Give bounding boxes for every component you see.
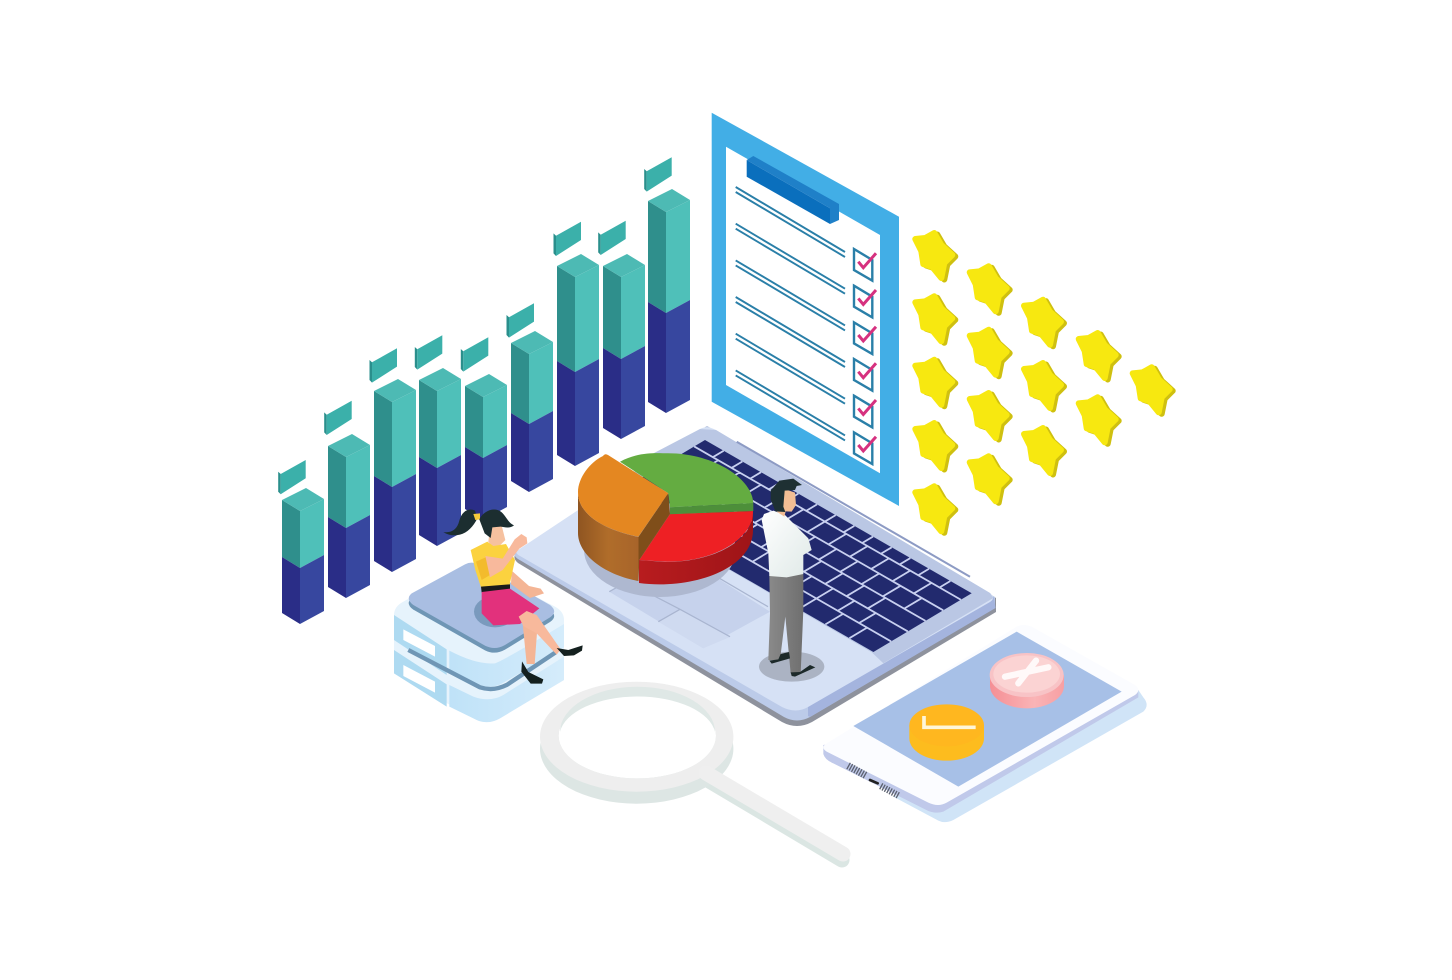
far arm (511, 571, 544, 598)
database stack (394, 563, 564, 722)
bar 6 (506, 303, 553, 492)
smartphone (823, 625, 1147, 822)
hair (479, 509, 514, 538)
top pad edge (409, 567, 554, 653)
bar 5 (461, 337, 507, 520)
blouse (471, 542, 515, 589)
man standing (759, 479, 824, 682)
green slice (620, 453, 753, 514)
bar 4 (415, 335, 461, 546)
face (488, 523, 505, 547)
shirt (762, 511, 812, 577)
screen (853, 632, 1122, 787)
bar 8 (598, 221, 645, 439)
red slice (639, 511, 753, 584)
laptop (514, 426, 996, 726)
near arm (485, 534, 527, 577)
woman seated (443, 509, 583, 684)
magnifying glass (540, 682, 843, 860)
seam (408, 650, 556, 689)
upper leg (519, 611, 561, 655)
bar 1 (278, 460, 324, 624)
trackpad (609, 553, 770, 648)
skirt (482, 589, 539, 625)
trousers (768, 574, 803, 673)
checkboxes (854, 249, 876, 464)
phone edge (823, 690, 1138, 813)
accept button (909, 704, 984, 761)
orange slice (578, 454, 670, 581)
phone face (823, 625, 1138, 805)
speaker and port (848, 766, 899, 796)
hair tie (473, 513, 480, 520)
pie chart (578, 453, 753, 597)
right faces (449, 624, 564, 687)
shoes (521, 645, 583, 684)
checklist lines (736, 187, 845, 440)
reject button (990, 653, 1064, 708)
left faces (394, 615, 447, 675)
bar chart (278, 157, 690, 624)
floor shadow (759, 652, 824, 682)
laptop keyboard deck (607, 429, 993, 663)
database body (394, 563, 564, 722)
belt (481, 584, 510, 593)
label plates (403, 629, 435, 657)
skirt shadow (474, 596, 516, 627)
top pad (409, 563, 554, 648)
bar 9 (644, 157, 690, 413)
phone shadow (893, 690, 1147, 822)
bar 7 (554, 222, 599, 466)
keyboard (607, 440, 972, 652)
clipboard checklist (712, 113, 899, 506)
bar 3 (370, 348, 416, 572)
ponytail (443, 510, 477, 535)
hair (771, 479, 802, 512)
pie shadow (584, 503, 736, 597)
rating stars (915, 233, 1173, 533)
bar 2 (324, 401, 370, 598)
clipboard clip (747, 156, 839, 224)
head (777, 488, 796, 517)
shoes (769, 652, 815, 677)
lower leg (523, 623, 537, 664)
